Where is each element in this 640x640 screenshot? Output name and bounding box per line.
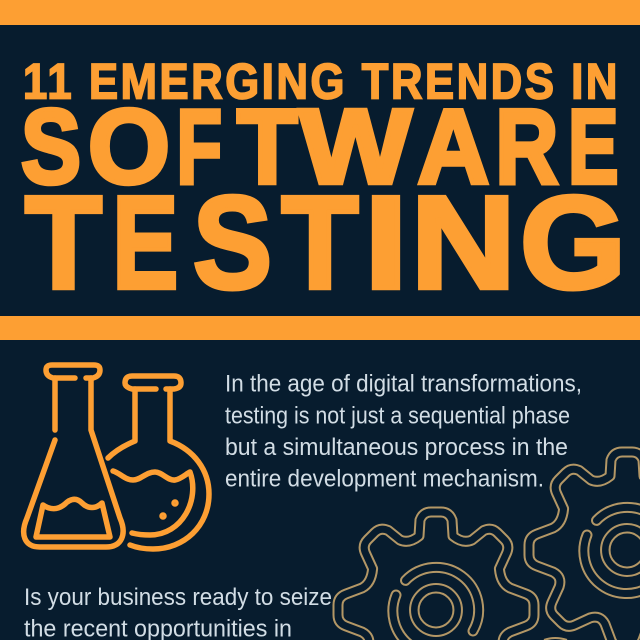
title: T xyxy=(282,169,358,316)
intro paragraph: entire development mechanism. xyxy=(225,466,544,493)
title: T xyxy=(237,88,298,206)
title: G xyxy=(520,169,626,316)
question paragraph: Is your business ready to seize xyxy=(24,584,332,611)
title: W xyxy=(300,88,412,206)
round flask xyxy=(108,376,209,549)
intro paragraph xyxy=(225,370,582,493)
intro paragraph: but a simultaneous process in the xyxy=(225,434,568,461)
intro paragraph: In the age of digital transformations, xyxy=(225,370,582,398)
lower orange bar xyxy=(0,316,640,340)
title: T xyxy=(25,169,102,316)
title: A xyxy=(418,88,489,206)
icon: gear left xyxy=(338,512,534,640)
title: O xyxy=(88,88,170,206)
intro paragraph: testing is not just a sequential phase xyxy=(225,402,570,429)
title: E xyxy=(112,169,178,316)
question paragraph xyxy=(24,584,332,640)
title: S xyxy=(21,88,81,206)
icon: third gear tooth xyxy=(544,638,567,640)
title: F xyxy=(176,88,222,206)
icon: gear right xyxy=(529,452,640,640)
conical flask xyxy=(24,365,123,547)
title: N xyxy=(411,169,516,316)
icon: flasks xyxy=(24,365,209,549)
title: E xyxy=(568,88,618,206)
title xyxy=(21,53,626,316)
title: I xyxy=(364,169,408,316)
title: S xyxy=(193,169,272,316)
title: R xyxy=(495,88,558,206)
top orange bar xyxy=(0,0,640,25)
